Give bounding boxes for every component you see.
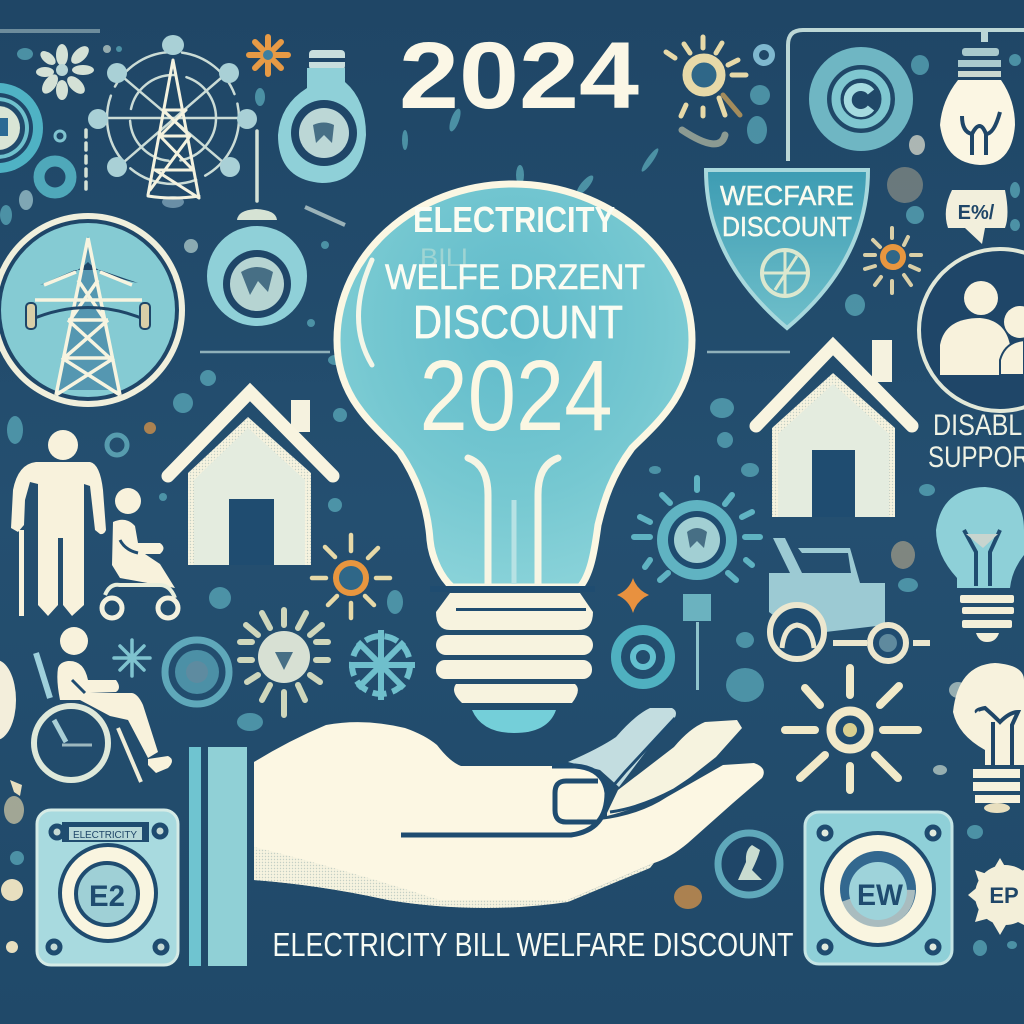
icon: orange star: [249, 37, 288, 74]
bulb right lower: [953, 663, 1024, 813]
shield emblem: [762, 250, 808, 296]
main bulb: [337, 184, 692, 733]
icon: target badge left: [0, 83, 43, 173]
icon: small ring top right: [756, 47, 772, 63]
top left rule: [0, 29, 100, 33]
cuff: [189, 747, 247, 966]
bulb right middle: [936, 487, 1024, 642]
icon: pound ring: [718, 833, 780, 895]
icon: sun top: [666, 37, 746, 144]
bulb text: DISCOUNT: [413, 296, 623, 348]
shield: welfare discount: DISCOUNT: [722, 211, 852, 242]
house right: [756, 340, 912, 517]
left edge partial bulb: [0, 660, 16, 740]
shield text: WECFARE: [720, 180, 854, 211]
dotted wrist band: [254, 847, 654, 908]
shield: welfare discount: [706, 170, 868, 328]
gear right: EP: [989, 883, 1019, 908]
icon: small drop: [55, 131, 65, 141]
middle finger: [607, 720, 742, 816]
post: [683, 594, 711, 690]
wheelchair person: [102, 488, 178, 618]
icon: badge ring: [165, 640, 229, 704]
divider lines beside bulb: [200, 351, 790, 353]
icon: bulb top centre-left: [278, 50, 366, 183]
bulb text: [385, 199, 645, 452]
icon: copyright target: [818, 56, 904, 142]
disabled person wheelchair: [34, 627, 172, 782]
bulb text: BILL: [420, 244, 476, 272]
cream left accent: [1, 780, 23, 953]
meter right: EW: [857, 879, 904, 912]
house left: [168, 392, 333, 565]
icon: lamp bottle: [207, 209, 307, 326]
frame line: [788, 30, 1024, 161]
meter left: [37, 810, 178, 965]
bottom caption: ELECTRICITY BILL WELFARE DISCOUNT: [272, 926, 794, 963]
icon: small ring: [39, 161, 71, 193]
icon: bulb top right: [940, 30, 1015, 165]
icon: speech bubble: [946, 190, 1008, 244]
bulb filament: [468, 458, 558, 586]
index finger: [568, 708, 676, 787]
finger shadows: [607, 718, 722, 812]
thumb line: [401, 766, 607, 835]
text: disable support: [928, 409, 1024, 474]
flower small: [114, 640, 150, 676]
icon: target ring bottom centre: [616, 630, 670, 684]
bulb text: WELFE DRZENT: [385, 258, 645, 297]
tractor: [769, 538, 930, 661]
icon: pylon circle: [0, 213, 185, 407]
meter left: E2: [89, 880, 125, 913]
palm and ring finger: [254, 722, 764, 908]
icon: flower: [36, 43, 94, 100]
icon: sun-gear centre right: [634, 478, 760, 580]
meter left: ELECTRICITY: [73, 830, 137, 841]
icon: sun right of shield: [865, 228, 921, 293]
thumb nail: [555, 781, 598, 822]
gear right: [968, 858, 1024, 935]
icon: sun orange: [312, 535, 390, 618]
icon: speech bubble: E%/: [958, 202, 995, 224]
icon: sun diamond: [240, 610, 328, 715]
icon: snow wheel: [349, 630, 415, 700]
icon: family circle: [919, 249, 1024, 411]
icon: sun lower right: [785, 668, 918, 790]
elder person with cane: [11, 430, 106, 616]
bulb text: ELECTRICITY: [413, 199, 615, 240]
icon: pylon wheel: [86, 35, 257, 201]
bulb text: 2024: [420, 340, 612, 452]
title: 2024: 2024: [399, 23, 639, 129]
meter right: [805, 812, 952, 964]
orange sparkle: [617, 578, 649, 613]
open hand: [254, 708, 764, 908]
bulb base: [430, 586, 595, 733]
